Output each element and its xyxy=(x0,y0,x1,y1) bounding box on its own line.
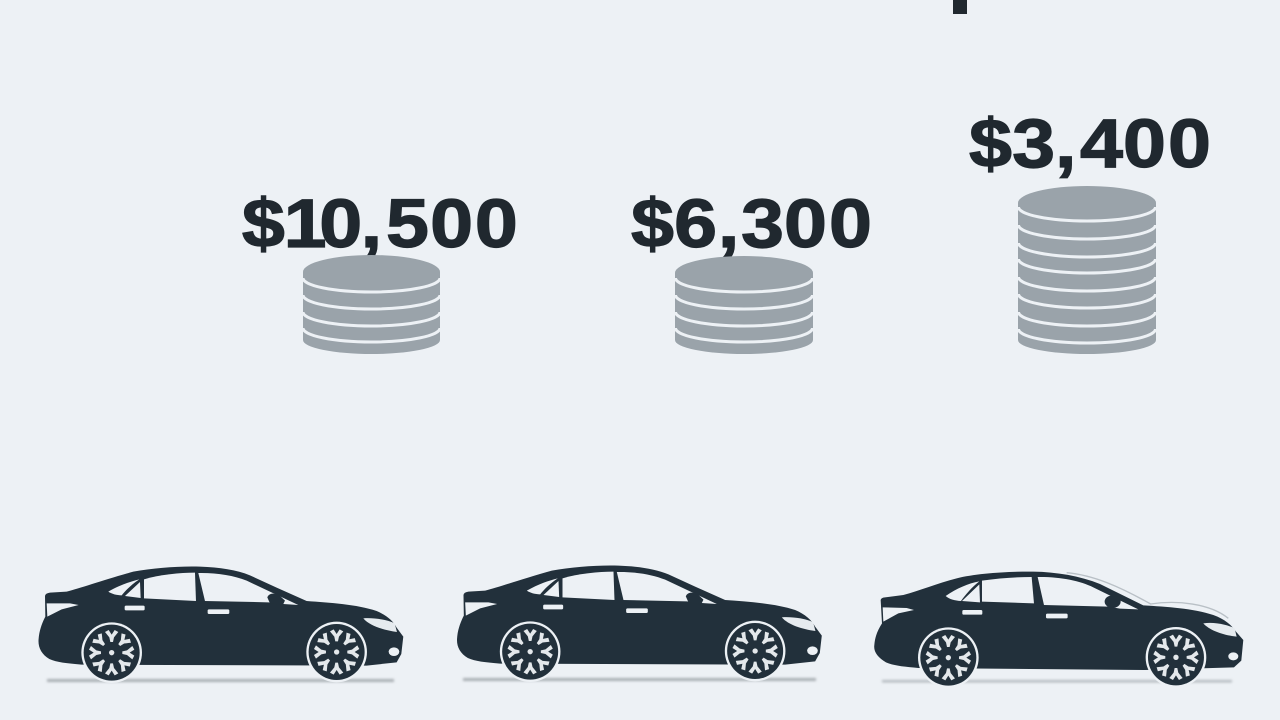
car 2 with ground shadow xyxy=(457,566,822,682)
cropped title fragment xyxy=(953,0,967,14)
icon: coin stack, small xyxy=(303,255,440,354)
label: $10,500: $10,500 xyxy=(242,185,518,262)
icon: coin stack, tall xyxy=(1018,186,1156,354)
column 1: $10,500 xyxy=(242,185,518,354)
icon: coin stack, small xyxy=(675,256,813,354)
column 2: $6,300 xyxy=(631,185,872,354)
label: $6,300: $6,300 xyxy=(631,185,872,262)
car 1 with ground shadow xyxy=(38,567,403,683)
label: $3,400: $3,400 xyxy=(969,105,1211,182)
column 3: $3,400 xyxy=(969,105,1211,354)
car 3 with ground shadow xyxy=(874,572,1243,688)
